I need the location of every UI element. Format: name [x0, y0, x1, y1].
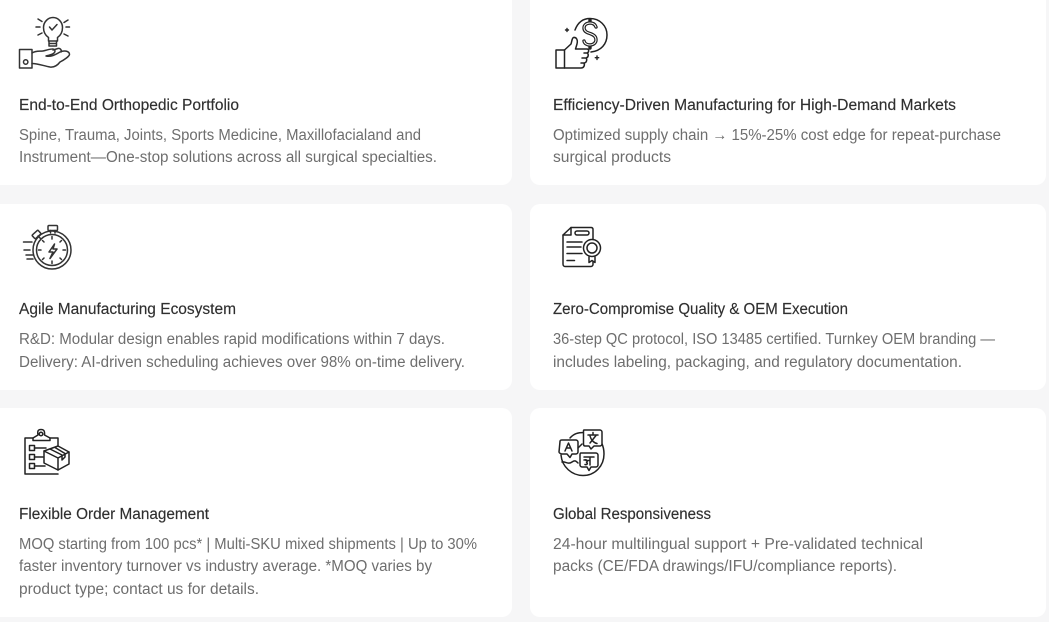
text block: Spine, Trauma, Joints, Sports Medicine, Maxillofacialand and — [19, 127, 421, 144]
heading: End-to-End Orthopedic Portfolio — [19, 97, 239, 114]
text block: faster inventory turnover vs industry average. *MOQ varies by — [19, 558, 432, 575]
text block: surgical products — [553, 149, 671, 166]
text block — [553, 127, 1001, 166]
panel: Agile Manufacturing Ecosystem — [0, 204, 512, 390]
heading: Zero-Compromise Quality & OEM Execution — [553, 301, 848, 318]
text block: product type; contact us for details. — [19, 581, 259, 598]
heading: Flexible Order Management — [19, 506, 210, 523]
icon: certificate with ribbon — [563, 228, 600, 266]
panel: Efficiency-Driven Manufacturing — [530, 0, 1046, 185]
heading: Global Responsiveness — [553, 506, 711, 523]
icon: clipboard with package — [25, 430, 69, 474]
text block: MOQ starting from 100 pcs* | Multi-SKU mixed shipments | Up to 30% — [19, 536, 477, 553]
text block: packs (CE/FDA drawings/IFU/compliance reports). — [553, 558, 897, 575]
icon: thumbs up with dollar — [556, 18, 607, 68]
icon: globe with language bubbles — [559, 430, 604, 476]
text block: Instrument—One-stop solutions across all surgical specialties. — [19, 149, 437, 166]
text block: 36-step QC protocol, ISO 13485 certified. Turnkey OEM branding — — [553, 331, 995, 348]
text block: 24-hour multilingual support + Pre-validated technical — [553, 536, 923, 553]
panel: Zero-Compromise Quality — [530, 204, 1046, 390]
text block — [19, 536, 477, 598]
text block: Optimized supply chain → 15%-25% cost edge for repeat-purchase — [553, 127, 1001, 144]
heading: Agile Manufacturing Ecosystem — [19, 301, 236, 318]
text block: R&D: Modular design enables rapid modifications within 7 days. — [19, 331, 445, 348]
text block: includes labeling, packaging, and regulatory documentation. — [553, 354, 962, 371]
heading: Efficiency-Driven Manufacturing for High-Demand Markets — [553, 97, 956, 114]
panel: Global Responsiveness — [530, 408, 1046, 617]
panel: End-to-End Orthopedic Portfolio — [0, 0, 512, 185]
text block: Delivery: AI-driven scheduling achieves over 98% on-time delivery. — [19, 354, 465, 371]
text block — [553, 331, 995, 371]
icon: light bulb over hand — [20, 18, 70, 68]
text block — [19, 127, 437, 166]
icon: stopwatch with bolt — [24, 226, 71, 269]
text block — [553, 536, 923, 575]
text block — [19, 331, 465, 371]
panel: Flexible Order Management — [0, 408, 512, 617]
